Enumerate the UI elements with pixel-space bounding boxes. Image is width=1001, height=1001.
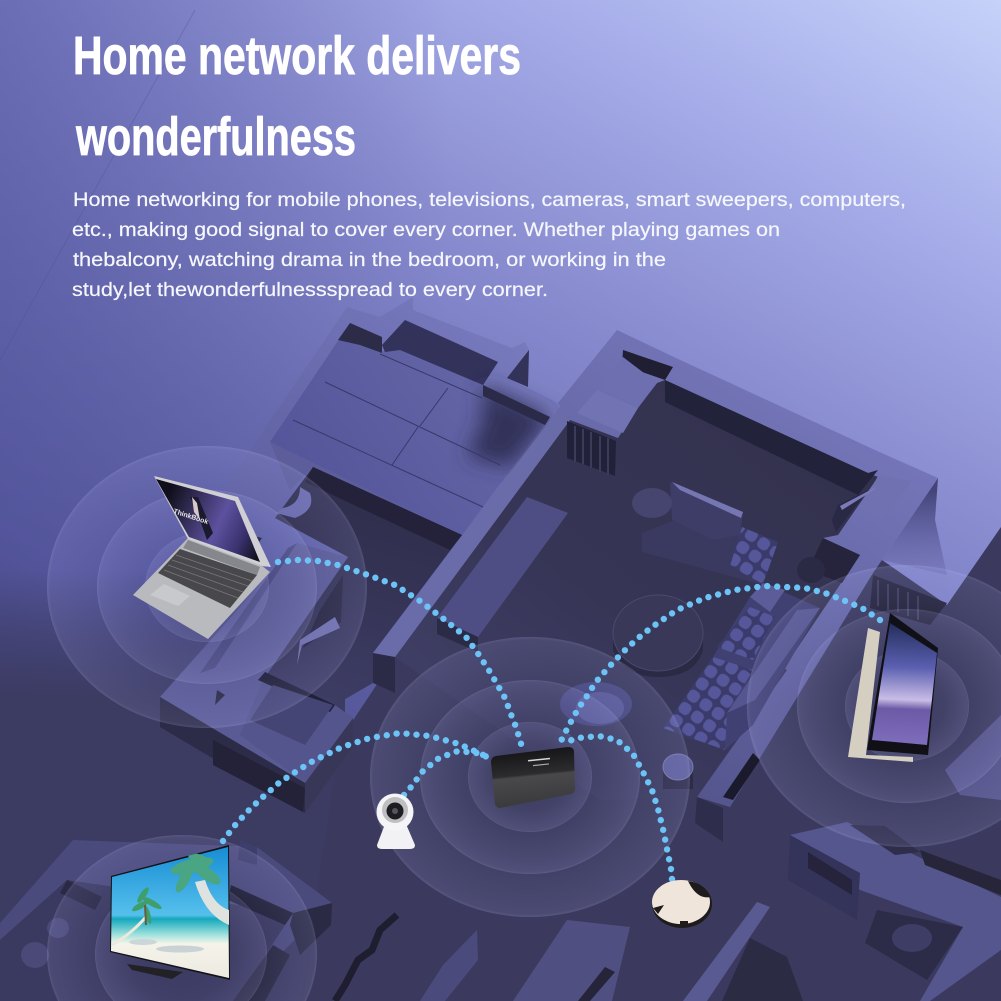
title: wonderfulness (75, 107, 356, 167)
armchair (560, 682, 632, 726)
lower dark floor (300, 527, 1001, 1001)
bedroom bed (945, 715, 1001, 800)
dark wedge mirror (303, 575, 343, 648)
lower-left dark floor (0, 570, 345, 1001)
pillar shade (507, 350, 529, 387)
link: laptop to router (278, 560, 522, 747)
living room floor (395, 380, 878, 800)
icon: phone (848, 613, 938, 762)
signal rings: phone (747, 565, 1001, 847)
signal rings: router (370, 637, 690, 917)
upper-left room wall slab (223, 297, 570, 657)
icon: robot vacuum (652, 880, 712, 928)
description text: thebalcony, watching drama in the bedroom, or working in the (73, 249, 666, 271)
side of right corner wall (882, 478, 947, 575)
upper sofa (642, 482, 778, 585)
icon: television (110, 845, 230, 980)
link: robot vacuum to router (563, 736, 672, 879)
light band below room A (270, 442, 462, 548)
bottom right block (788, 822, 1001, 1001)
signal rings: laptop (47, 446, 367, 728)
link: camera to router (404, 751, 490, 795)
bedroom closet (870, 575, 947, 625)
title: Home network delivers (73, 26, 521, 86)
right corner niche (860, 476, 912, 520)
description text: etc., making good signal to cover every corner. Whether playing games on (72, 219, 780, 241)
curtain (567, 421, 616, 476)
title (73, 26, 521, 167)
side table (632, 488, 672, 518)
icon: camera (376, 794, 415, 849)
closet niches (622, 350, 673, 380)
dotted links (223, 560, 880, 879)
room A floor (270, 320, 550, 535)
main diagonal wall (373, 403, 570, 657)
living room shelf (437, 497, 568, 637)
left block band and floor (160, 543, 348, 783)
description text: study,let thewonderfulnessspread to every corner. (72, 279, 548, 301)
living room wall slab (558, 330, 938, 807)
floor plan: building structure (0, 297, 1001, 1001)
right wall lower slot and end (695, 797, 723, 842)
round coffee table (613, 595, 703, 677)
lamp table (797, 557, 825, 583)
room A floor tile lines (293, 354, 500, 507)
lower-left wall block sides (160, 697, 305, 813)
link: television to router (223, 733, 490, 841)
signal rings: television (47, 835, 317, 1001)
description text: Home networking for mobile phones, televisions, cameras, smart sweepers, computers, (73, 189, 906, 211)
room B dark floor (263, 467, 462, 705)
lower tufted sofa (663, 583, 820, 750)
door arc (276, 487, 311, 518)
icon: laptop: ThinkBook (172, 508, 209, 526)
bottom center wall pieces (420, 930, 478, 1001)
description text (72, 189, 906, 301)
link: phone to router (560, 586, 880, 743)
bottom-left room block (0, 840, 332, 1001)
stool (663, 754, 693, 789)
icon: laptop (133, 476, 271, 639)
icon: router (491, 747, 575, 808)
